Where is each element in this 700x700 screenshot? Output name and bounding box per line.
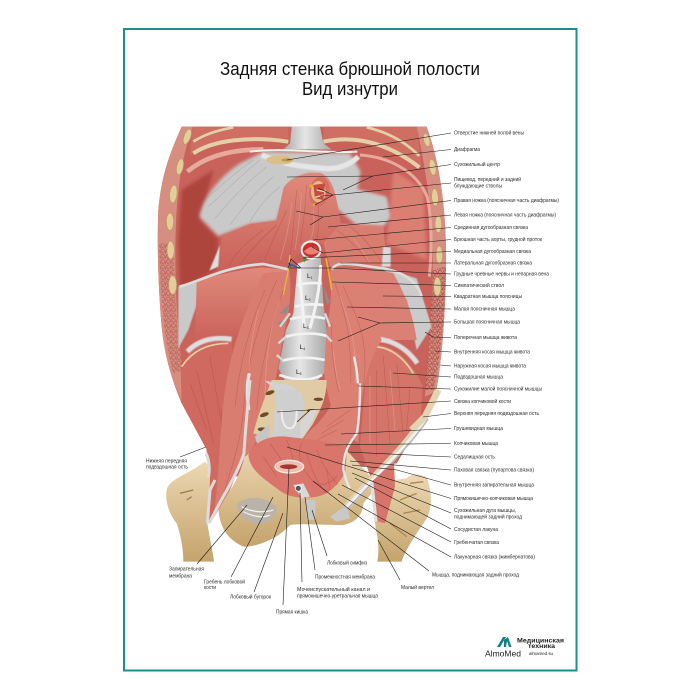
logo: AlmoMed	[485, 637, 564, 658]
bottom labels: Промежностная мембрана	[315, 574, 375, 580]
title: Задняя стенка брюшной полости	[220, 58, 480, 79]
rectum	[275, 460, 304, 473]
right column labels: Копчиковая мышца	[454, 441, 498, 447]
right column labels: Подвздошная мышца	[454, 375, 503, 381]
splanchnic nerves and azygos vein	[283, 255, 332, 295]
right column labels: Симпатический ствол	[454, 282, 504, 289]
right column labels: Малая поясничная мышца	[454, 306, 515, 312]
abdominal wall cut edge, left	[158, 127, 193, 407]
bottom labels: Запирательная	[169, 567, 204, 573]
bottom labels	[146, 458, 519, 615]
bottom labels: Малый вертел	[401, 584, 434, 591]
body wall silhouette	[158, 127, 446, 477]
inferior vena cava opening	[266, 155, 294, 165]
right column labels: Правая ножка (поясничная часть диафрагмы)	[454, 198, 559, 204]
logo text: техника	[528, 643, 555, 650]
bottom labels: кости	[204, 585, 216, 591]
muscle mesh in the flank	[425, 267, 446, 390]
right column labels: Сосудистая лакуна	[454, 527, 498, 533]
dark shading of lateral walls	[178, 170, 427, 290]
right column labels: Латеральная дугообразная связка	[454, 261, 532, 267]
diaphragm central tendon	[199, 150, 389, 236]
icon: logo mark	[497, 637, 512, 647]
pelvic girdle bone	[218, 447, 378, 547]
inguinal ligament right	[346, 417, 427, 508]
right column labels: Грудные чревные нервы и непарная вена	[454, 271, 549, 277]
urethral canal and perineal membrane	[293, 483, 315, 520]
right column labels: Пищевод, передний и задний	[454, 176, 521, 183]
right column labels: Медиальная дугообразная связка	[454, 249, 531, 255]
psoas major right	[323, 270, 382, 443]
bottom labels: Прямая кишка	[276, 609, 308, 615]
vertebra labels: 3	[307, 326, 309, 330]
right column labels: Сухожильная дуга мышцы,	[454, 508, 516, 514]
vertebra labels: 1	[311, 276, 313, 280]
vertebra labels: L	[296, 369, 300, 376]
right column labels: поднимающей задний проход	[454, 513, 522, 520]
right tendon of psoas minor	[343, 383, 360, 488]
bottom labels: Мышца, поднимающая задний проход	[432, 571, 519, 578]
bottom labels: мембрана	[169, 573, 192, 579]
right column labels: Квадратная мышца поясницы	[454, 294, 522, 300]
right column labels: Верхняя передняя подвздошная ость	[454, 411, 539, 417]
arcuate ligaments	[179, 264, 422, 297]
leader lines	[180, 133, 451, 605]
logo text	[485, 638, 564, 658]
lateral grey aponeuroses	[178, 245, 432, 350]
bottom labels: подвздошная ость	[146, 464, 188, 470]
anatomical illustration: posterior abdominal wall	[158, 127, 446, 562]
inguinal ligament left	[209, 380, 250, 523]
psoas major left	[213, 271, 290, 518]
logo text: AlmoMed	[485, 648, 521, 658]
right column labels: Лакунарная связка (жимбернатова)	[454, 555, 535, 561]
right column labels: Большая поясничная мышца	[454, 319, 520, 325]
right column labels: Наружная косая мышца живота	[454, 364, 526, 370]
psoas minor tendon	[354, 357, 358, 410]
iliac crest right	[412, 390, 438, 430]
right column labels: Левая ножка (поясничная часть диафрагмы)	[454, 213, 556, 219]
title	[220, 58, 480, 99]
sympathetic chain grey rami beside spine	[277, 285, 330, 327]
poster frame	[124, 29, 576, 670]
right column labels: Отверстие нижней полой вены	[454, 130, 524, 136]
lower pelvis details	[206, 380, 438, 524]
bottom labels: Гребень лобковой	[204, 578, 245, 585]
right column labels: Гребенчатая связка	[454, 540, 499, 546]
right column labels: Диафрагма	[454, 147, 480, 153]
bottom labels: Лобковый симфиз	[327, 560, 368, 567]
vertebra labels: 2	[309, 298, 311, 302]
right column labels: Внутренняя запирательная мышца	[454, 483, 534, 489]
right column labels: Прямокишечно-копчиковая мышца	[454, 496, 533, 502]
vertebra labels: 5	[300, 372, 302, 376]
aortic hiatus with aorta and thoracic duct	[301, 240, 321, 263]
right column labels: Сухожильный центр	[454, 161, 500, 168]
right column labels: Срединная дугообразная связка	[454, 225, 528, 231]
left femur	[166, 462, 214, 562]
right column labels: Связка копчиковой кости	[454, 398, 511, 405]
bottom labels: Лобковый бугорок	[230, 594, 272, 601]
right column labels: Сухожилие малой поясничной мышцы	[454, 386, 542, 393]
right column labels: блуждающие стволы	[454, 183, 502, 189]
right column labels: Поперечная мышца живота	[454, 335, 517, 341]
vertebra labels: 4	[303, 347, 305, 351]
diaphragm crura	[220, 173, 390, 270]
left iliac spine tendon	[206, 453, 215, 523]
sacrum	[253, 380, 327, 445]
bottom labels: Нижняя передняя	[146, 458, 187, 464]
sacral foramina	[258, 389, 323, 431]
bottom labels: Мочеиспускательный канал и	[297, 586, 370, 593]
right column labels: Паховая связка (пупартова связка)	[454, 468, 534, 474]
thoracic vertebra above diaphragm	[283, 127, 332, 149]
quadratus lumborum right	[330, 268, 417, 340]
obturator membrane	[237, 498, 350, 524]
lumbar vertebral column	[277, 257, 332, 386]
title: Вид изнутри	[302, 78, 398, 99]
pelvic floor levator ani	[248, 410, 350, 498]
right lesser trochanter iliopsoas	[372, 462, 395, 523]
right column labels: Седалищная ость	[454, 454, 495, 460]
right femur	[370, 474, 431, 562]
esophageal opening with vagal trunks	[307, 175, 332, 208]
vertebra labels: L	[307, 273, 311, 280]
vertebra labels: L	[303, 323, 307, 330]
rib cross-sections, left	[166, 128, 193, 294]
upper intercostal muscles and ribs	[187, 127, 431, 277]
piriformis muscle	[302, 383, 361, 447]
right column labels	[454, 130, 559, 561]
logo text: Медицинская	[517, 638, 564, 644]
right column labels: Внутренняя косая мышца живота	[454, 350, 530, 356]
quadratus lumborum left	[195, 267, 287, 341]
coccygeal ligament	[255, 390, 317, 448]
vertebra labels: L	[305, 295, 309, 302]
right column labels: Брюшная часть аорты, грудной проток	[454, 236, 543, 243]
logo text: almamed.su	[529, 651, 553, 657]
rib cross-sections, right	[422, 133, 443, 296]
abdominal wall cut edge, right	[417, 127, 446, 397]
iliacus and iliopsoas left	[181, 338, 244, 523]
lower lumbar vertebra overlap	[265, 381, 297, 390]
vertebra labels	[296, 273, 313, 376]
bottom labels: прямокишечно-уретральная мышца	[297, 593, 378, 599]
iliacus and iliopsoas right	[360, 340, 423, 485]
vertebra labels: L	[300, 344, 303, 351]
right column labels: Грушевидная мышца	[454, 426, 503, 432]
